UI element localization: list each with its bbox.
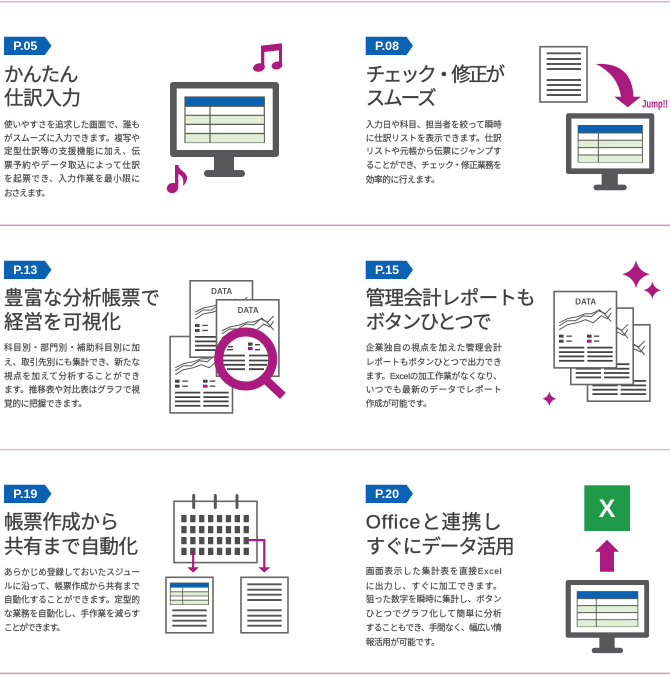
body text: 企業独自の視点を加えた管理会計 — [366, 342, 502, 352]
badge: P.08: P.08 — [375, 39, 399, 53]
badge: P.20 — [366, 485, 413, 503]
badge: P.15: P.15 — [375, 263, 399, 277]
body text: レポートもボタンひとつで出力でき — [366, 356, 502, 367]
arrow: up — [595, 540, 619, 572]
heading — [4, 512, 138, 558]
body text: いつでも最新のデータでレポート — [366, 384, 502, 394]
heading: すぐにデータ活用 — [366, 536, 515, 558]
body text: ことができます。 — [4, 622, 65, 632]
body text: 作成が可能です。 — [366, 398, 432, 408]
body text: 視点を加えて分析することができ — [4, 370, 140, 381]
heading: 管理会計レポートも — [366, 287, 536, 309]
body text: 狙った数字を瞬時に集計し、ボタン — [366, 593, 502, 604]
icon: text document — [241, 577, 288, 633]
icon: monitor — [566, 580, 649, 653]
body text: 報活用が可能です。 — [366, 636, 440, 647]
icon: calendar — [174, 496, 257, 563]
body text: 画面表示した集計表を直接Excel — [366, 565, 502, 576]
heading: かんたん — [4, 64, 78, 86]
badge: P.19: P.19 — [13, 487, 38, 501]
body text: 票予約やデータ取込によって仕訳 — [4, 159, 140, 170]
heading: 仕訳入力 — [4, 88, 81, 110]
body text: あらかじめ登録しておいたスジュー — [4, 566, 140, 577]
body text: ます。推移表や対比表はグラフで視 — [4, 384, 140, 394]
arrow: to table document — [187, 552, 199, 573]
heading — [366, 287, 536, 334]
icon: stacked reports — [554, 292, 650, 401]
body text — [4, 566, 140, 632]
body text — [4, 118, 140, 198]
body text: な業務を自動化し、手作業を減らす — [4, 608, 140, 618]
body text: おさえます。 — [4, 188, 50, 198]
badge: P.20: P.20 — [375, 487, 399, 501]
heading — [4, 64, 81, 110]
body text: 科目別・部門別・補助科目別に加 — [4, 342, 140, 352]
body text: ルに沿って、帳票作成から共有まで — [4, 580, 140, 591]
body text — [366, 118, 502, 184]
body text: 自動化することができます。定型的 — [4, 594, 140, 604]
body text: 効率的に行えます。 — [366, 173, 440, 184]
heading: Officeと連携し — [366, 512, 502, 534]
icon: beamed music note — [252, 43, 283, 73]
heading — [4, 287, 160, 334]
body text: 定型仕訳等の支援機能に加え、伝 — [4, 145, 140, 156]
badge: P.08 — [366, 37, 413, 55]
heading: 経営を可視化 — [4, 312, 121, 334]
heading — [366, 512, 515, 558]
body text: ます。Excelの加工作業がなくなり、 — [366, 370, 502, 381]
heading: ボタンひとつで — [366, 312, 492, 334]
icon: sparkles — [542, 260, 661, 406]
icon: document — [540, 47, 587, 102]
panel: 豊富な分析帳票で経営を可視化 — [4, 261, 286, 413]
panel: チェック・修正がスムーズ — [366, 37, 668, 190]
body text: ることができ、チェック・修正業務を — [366, 159, 502, 170]
panel: 管理会計レポートもボタンひとつで — [366, 260, 661, 408]
icon: monitor — [170, 82, 279, 177]
heading: チェック・修正が — [366, 64, 505, 86]
badge: P.13: P.13 — [13, 263, 38, 277]
icon: reports with magnifier: DATA — [211, 287, 232, 296]
body text: に出力し、すぐに加工できます。 — [366, 580, 502, 591]
body text: することもでき、手間なく、幅広い情 — [366, 622, 502, 632]
heading: 豊富な分析帳票で — [4, 287, 160, 309]
icon: table document — [166, 577, 213, 633]
body text: 入力日や科目、担当者を絞って瞬時 — [366, 118, 502, 129]
icon: magnifier — [219, 332, 286, 399]
icon: Excel: X — [599, 495, 616, 523]
arrow: jump — [596, 64, 641, 107]
icon: monitor — [566, 113, 654, 190]
badge: P.13 — [4, 261, 52, 279]
badge: P.15 — [366, 261, 413, 279]
body text — [366, 342, 502, 408]
icon: reports with magnifier — [170, 281, 286, 413]
badge: P.19 — [4, 485, 52, 503]
badge: P.05 — [4, 37, 52, 55]
icon: stacked reports: DATA — [575, 298, 596, 307]
heading: スムーズ — [366, 88, 437, 110]
body text: を起票でき、入力作業を最小限に — [4, 172, 140, 184]
panel: かんたん仕訳入力 — [4, 37, 283, 198]
body text: 覚的に把握できます。 — [4, 398, 87, 408]
arrow: to text document — [247, 539, 270, 573]
badge: P.05: P.05 — [13, 39, 38, 53]
body text: がスムーズに入力できます。複写や — [4, 132, 140, 143]
body text: 使いやすさを追求した画面で、誰も — [4, 118, 140, 129]
body text: ひとつでグラフ化して簡単に分析 — [366, 608, 502, 618]
icon: single music note — [166, 165, 187, 194]
body text: リストや元帳から伝票にジャンプす — [366, 145, 502, 156]
heading — [366, 64, 505, 110]
body text — [366, 565, 502, 647]
icon: Excel — [584, 485, 630, 531]
icon: reports with magnifier: DATA — [238, 306, 259, 315]
body text: え、取引先別にも集計でき、新たな — [4, 356, 140, 367]
body text — [4, 342, 140, 408]
panel: 帳票作成から共有まで自動化 — [4, 485, 288, 633]
heading: 共有まで自動化 — [4, 536, 138, 558]
heading: 帳票作成から — [4, 512, 119, 534]
panel: Officeと連携しすぐにデータ活用 — [366, 485, 649, 653]
body text: に仕訳リストを表示できます。仕訳 — [366, 132, 502, 143]
